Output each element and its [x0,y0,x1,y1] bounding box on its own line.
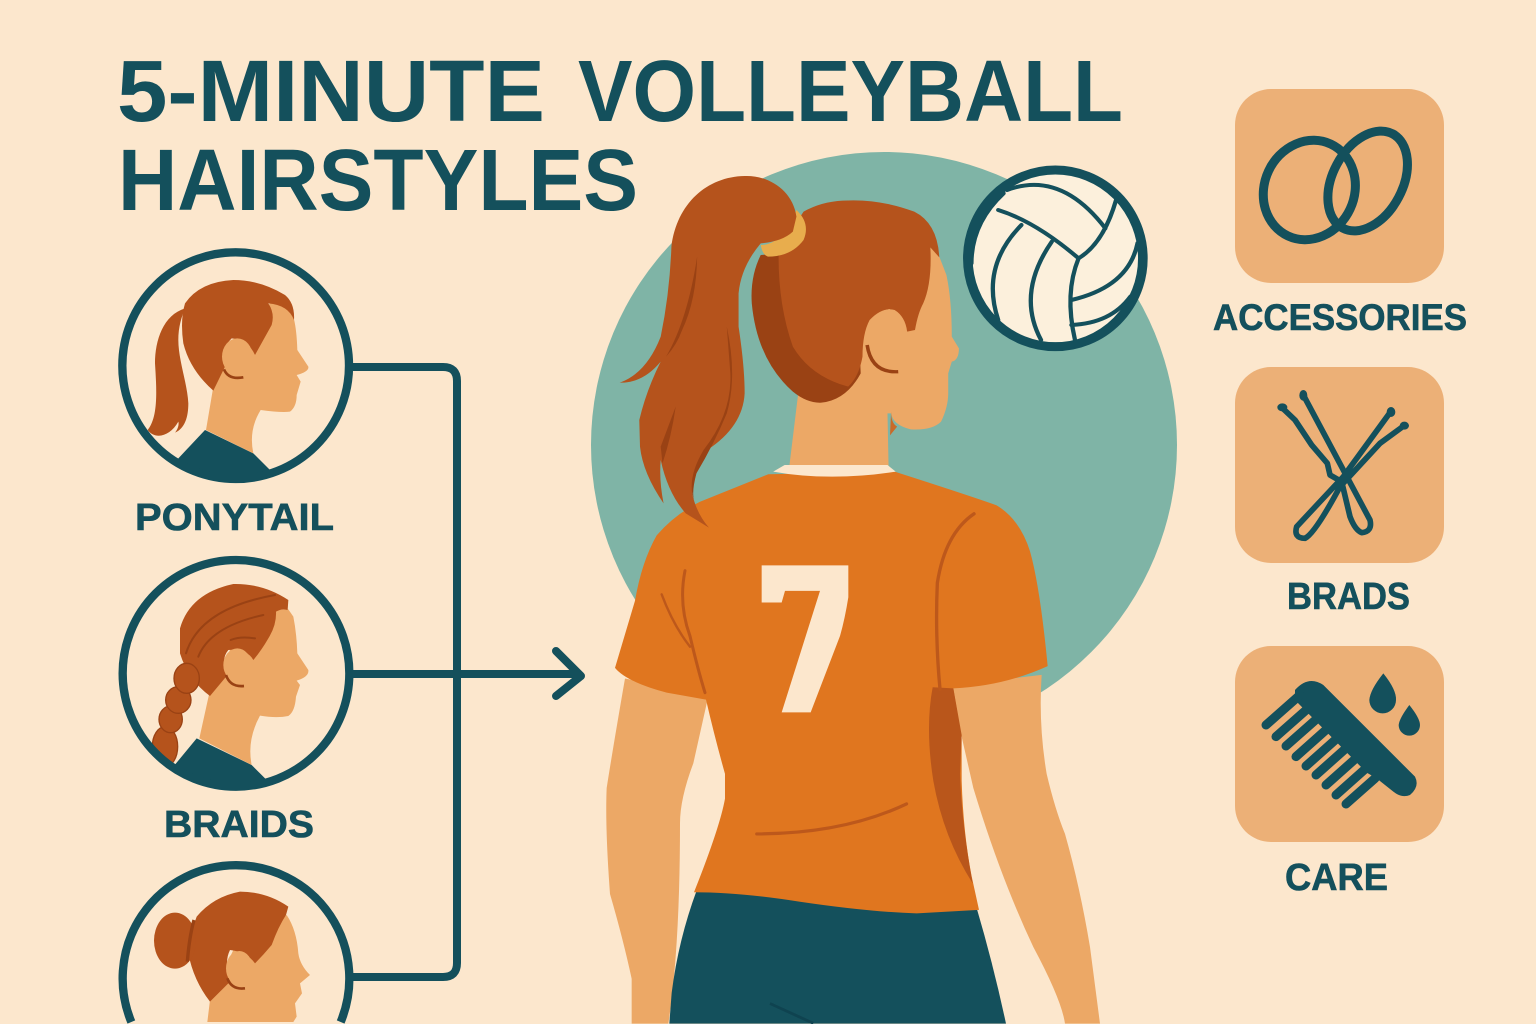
label: braids: BRAIDS [164,804,314,846]
icon: volleyball [968,170,1143,347]
panel: braids style [123,560,349,846]
icon: bobby pins [1277,390,1409,538]
title: 5-MINUTE [117,43,545,140]
label: care: CARE [1285,857,1388,899]
title: VOLLEYBALL [578,43,1123,140]
portrait: ponytail profile [122,252,349,493]
panel: ponytail style [122,252,349,539]
teal background circle [591,152,1177,738]
icon: hair ties [1247,117,1424,255]
label: accessories: ACCESSORIES [1213,297,1467,338]
player shorts [669,890,1006,1024]
player arms [606,675,1100,1024]
connector with arrow [352,367,581,977]
volleyball player [606,176,1100,1024]
player collar [773,465,896,477]
portrait: braids profile [123,560,349,803]
icon: comb and water drops [1266,673,1420,804]
player jersey with number 7 [615,472,1048,913]
title: HAIRSTYLES [118,132,638,229]
tile: accessories [1235,89,1444,283]
panel: accessories [1213,89,1467,338]
label: ponytail: PONYTAIL [135,497,334,539]
portrait: bun profile [123,865,349,1022]
panel: brads [1235,367,1444,618]
title [117,43,1123,229]
player ear [867,309,914,372]
tile: care [1235,646,1444,842]
panel: care [1235,646,1444,899]
panel: bun style [123,865,349,1022]
tile: brads [1235,367,1444,563]
label: brads: BRADS [1287,576,1410,618]
water drops [1369,673,1420,736]
player hair and ponytail [620,176,939,528]
player neck and face [789,247,959,467]
